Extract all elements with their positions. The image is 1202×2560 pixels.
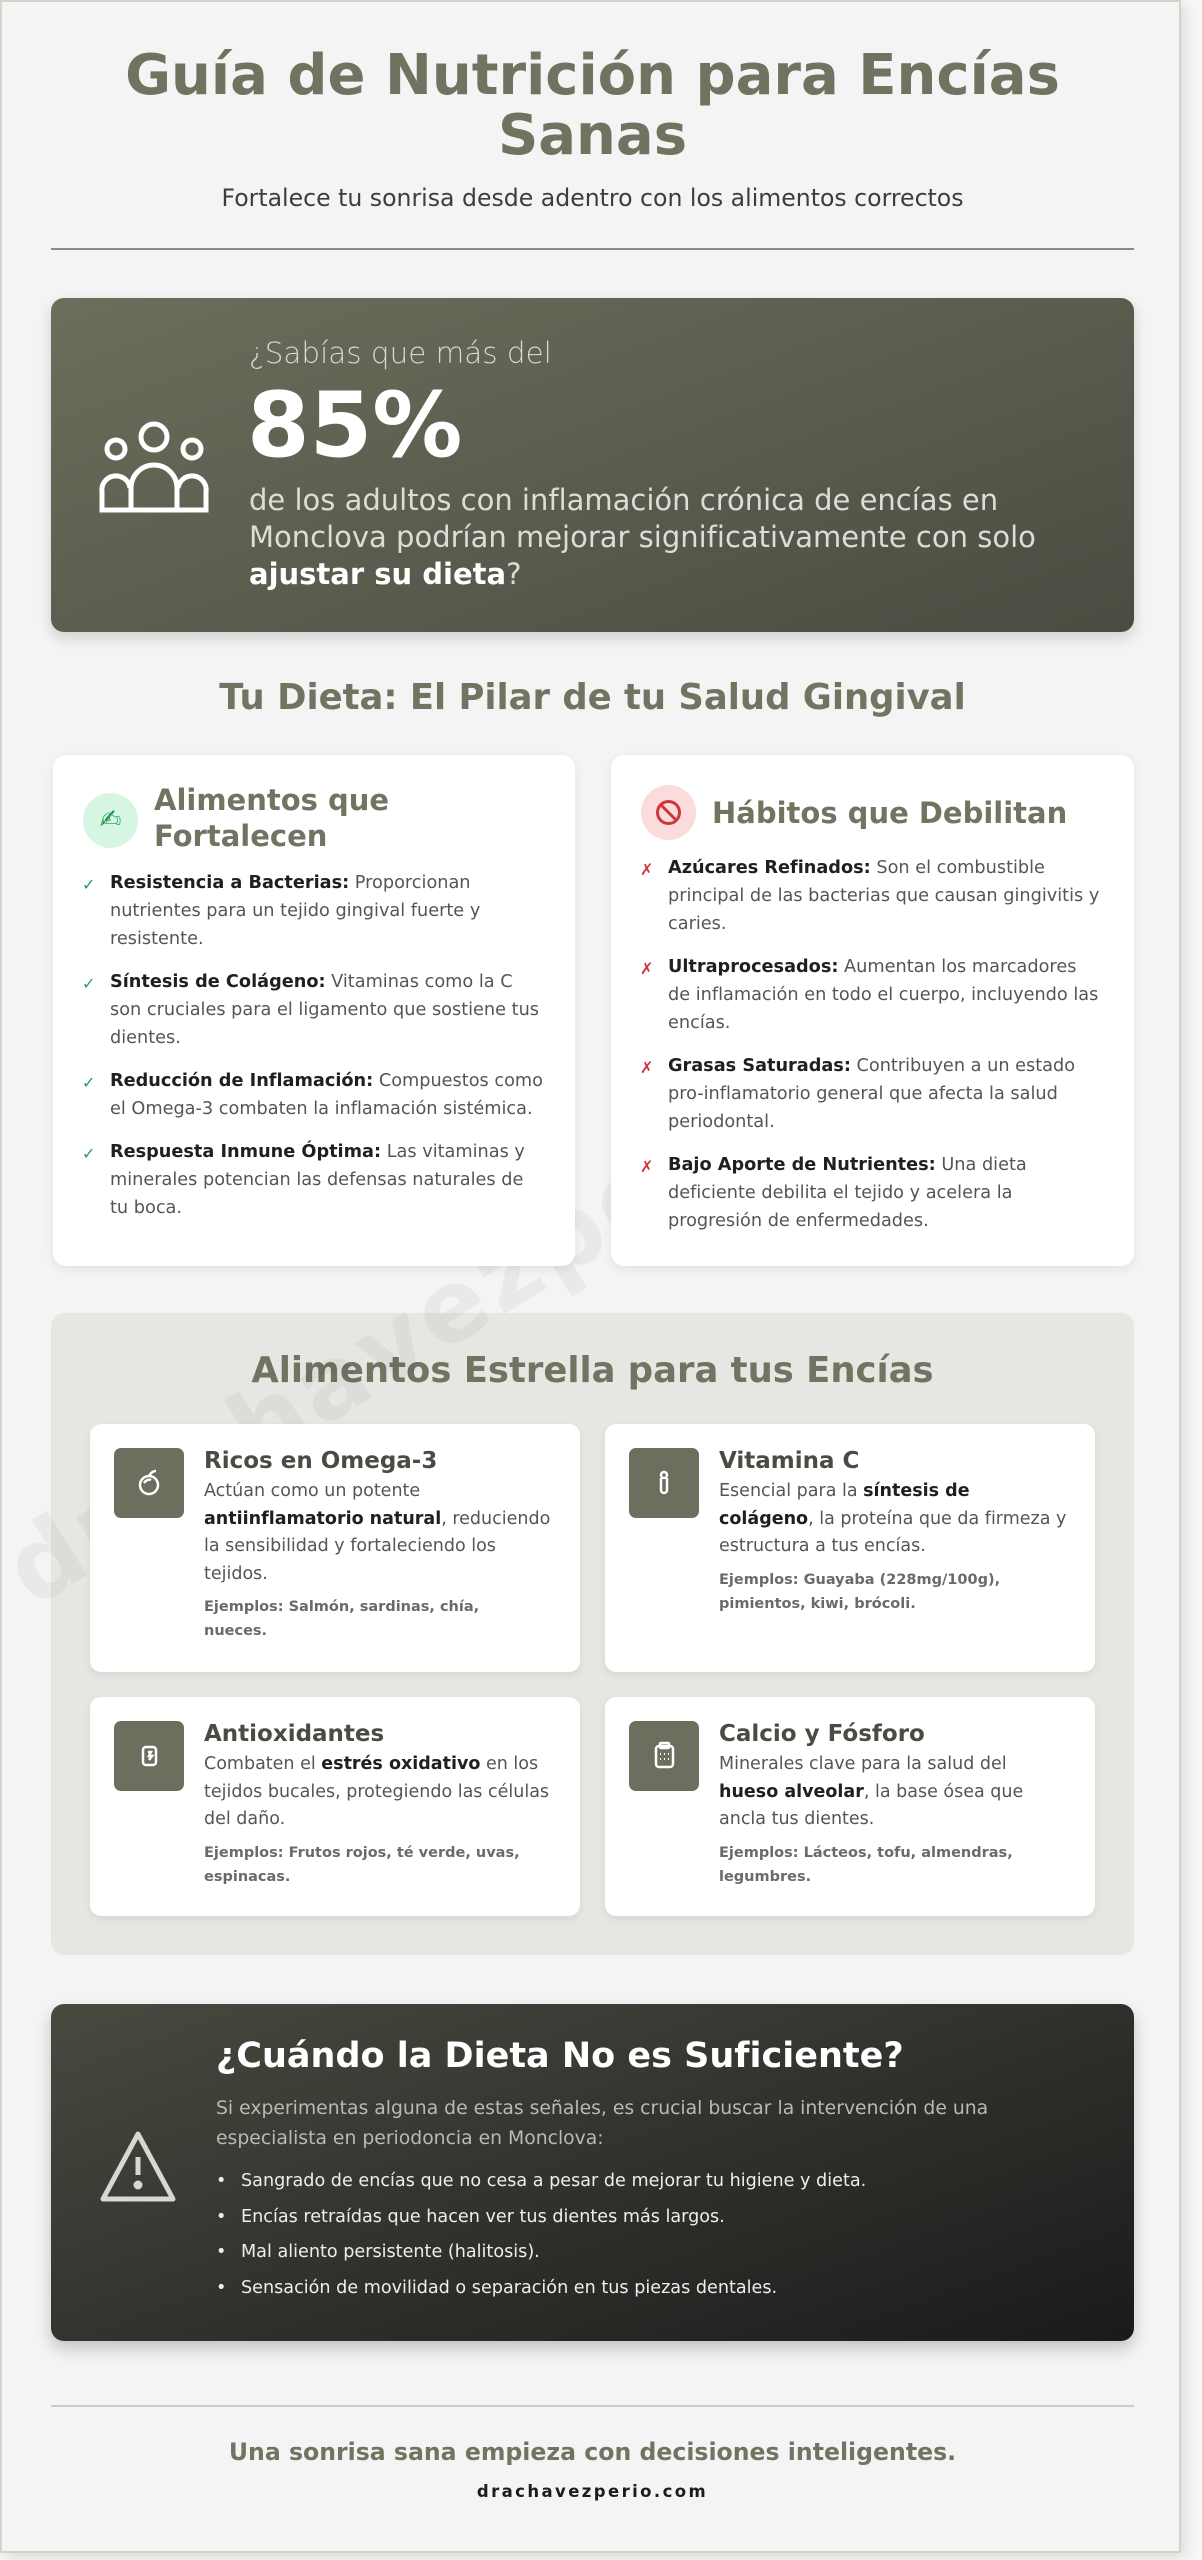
card: omega-3 <box>90 1424 580 1672</box>
card: antioxidantes: Combaten el estrés oxidativo en los tejidos bucales, protegiendo las células del daño. <box>204 1754 549 1829</box>
heading: Fortalecen <box>154 819 327 853</box>
footer url: drachavezperio.com <box>477 2482 708 2501</box>
title <box>125 43 1060 168</box>
heading: Alimentos que <box>154 783 389 817</box>
icon: warning <box>100 2132 176 2202</box>
stat number: 85% <box>247 373 462 478</box>
icon: people <box>99 422 209 512</box>
intro: Si experimentas alguna de estas señales, es crucial buscar la intervención de una especialista en periodoncia en Monclova: <box>216 2098 988 2149</box>
footer tagline: Una sonrisa sana empieza con decisiones inteligentes. <box>229 2438 956 2466</box>
icon <box>629 1448 699 1518</box>
list: Respuesta Inmune Óptima: Las vitaminas y minerales potencian las defensas naturales de tu boca. <box>110 1142 525 1218</box>
card: antioxidantes: Antioxidantes <box>204 1721 384 1747</box>
list: Bajo Aporte de Nutrientes: Una dieta deficiente debilita el tejido y acelera la progresión de enfermedades. <box>668 1155 1027 1231</box>
title: Guía de Nutrición para Encías <box>125 43 1060 108</box>
icon <box>114 1721 184 1791</box>
card: vitamina c <box>605 1424 1095 1672</box>
list: Azúcares Refinados: Son el combustible principal de las bacterias que causan gingivitis y caries. <box>668 858 1099 934</box>
panel: alimentos que fortalecen <box>53 755 575 1266</box>
icon: prohibited <box>641 785 696 840</box>
card: omega-3: Ejemplos: Salmón, sardinas, chía, nueces. <box>204 1599 479 1639</box>
list: ✓ <box>82 1073 95 1092</box>
icon: green hand: ✍ <box>100 805 121 835</box>
card: omega-3: Ricos en Omega-3 <box>204 1448 437 1474</box>
icon <box>629 1721 699 1791</box>
list <box>82 873 543 1218</box>
title: Sanas <box>498 103 687 168</box>
list: Síntesis de Colágeno: Vitaminas como la C son cruciales para el ligamento que sostiene tus dientes. <box>110 972 539 1048</box>
heading: ¿Cuándo la Dieta No es Suficiente? <box>216 2036 904 2076</box>
watermark: drachavezperio.com <box>0 888 1074 1629</box>
card: vitamina c: Vitamina C <box>719 1448 859 1474</box>
list: ✗ <box>640 1058 653 1077</box>
list: ✓ <box>82 875 95 894</box>
card: calcio: Ejemplos: Lácteos, tofu, almendras, legumbres. <box>719 1844 1013 1884</box>
panel: stat <box>51 298 1134 632</box>
panel: alert <box>51 2004 1134 2341</box>
list: signs: Sensación de movilidad o separación en tus piezas dentales. <box>241 2278 777 2298</box>
card: antioxidantes <box>90 1697 580 1916</box>
list: signs: Encías retraídas que hacen ver tus dientes más largos. <box>241 2206 725 2226</box>
heading: diet: Tu Dieta: El Pilar de tu Salud Gingival <box>219 677 966 718</box>
list: ✗ <box>640 860 653 879</box>
panel: habitos que debilitan <box>611 755 1134 1266</box>
heading: Hábitos que Debilitan <box>712 796 1067 830</box>
icon: green hand <box>83 793 138 848</box>
subtitle: Fortalece tu sonrisa desde adentro con los alimentos correctos <box>221 184 964 212</box>
stat description: de los adultos con inflamación crónica de encías en Monclova podrían mejorar significativamente con solo ajustar su dieta? <box>249 483 1036 591</box>
card: vitamina c: Ejemplos: Guayaba (228mg/100g), pimientos, kiwi, brócoli. <box>719 1572 1000 1612</box>
list: signs <box>218 2171 866 2298</box>
list: signs: Sangrado de encías que no cesa a pesar de mejorar tu higiene y dieta. <box>241 2171 866 2191</box>
card: calcio: Minerales clave para la salud del hueso alveolar, la base ósea que ancla tus dientes. <box>719 1754 1023 1829</box>
list: Reducción de Inflamación: Compuestos como el Omega-3 combaten la inflamación sistémica. <box>110 1071 543 1119</box>
stat lead: ¿Sabías que más del <box>249 336 552 370</box>
list: signs: Mal aliento persistente (halitosis). <box>241 2242 540 2262</box>
list: Grasas Saturadas: Contribuyen a un estado pro-inflamatorio general que afecta la salud periodontal. <box>668 1056 1075 1132</box>
heading <box>154 783 389 853</box>
card: calcio: Calcio y Fósforo <box>719 1721 925 1747</box>
list: Resistencia a Bacterias: Proporcionan nutrientes para un tejido gingival fuerte y resistente. <box>110 873 480 949</box>
list: ✗ <box>640 1157 653 1176</box>
card: omega-3: Actúan como un potente antiinflamatorio natural, reduciendo la sensibilidad y fortaleciendo los tejidos. <box>204 1481 550 1584</box>
card: calcio <box>605 1697 1095 1916</box>
heading: Alimentos Estrella para tus Encías <box>251 1350 934 1391</box>
panel: alimentos estrella <box>51 1313 1134 1955</box>
card: antioxidantes: Ejemplos: Frutos rojos, té verde, uvas, espinacas. <box>204 1844 520 1884</box>
list <box>640 858 1099 1231</box>
list: ✗ <box>640 959 653 978</box>
list: ✓ <box>82 974 95 993</box>
list: ✓ <box>82 1144 95 1163</box>
list: Ultraprocesados: Aumentan los marcadores de inflamación en todo el cuerpo, incluyendo las encías. <box>668 957 1098 1033</box>
icon <box>114 1448 184 1518</box>
card: vitamina c: Esencial para la síntesis de colágeno, la proteína que da firmeza y estructura a tus encías. <box>719 1481 1066 1556</box>
